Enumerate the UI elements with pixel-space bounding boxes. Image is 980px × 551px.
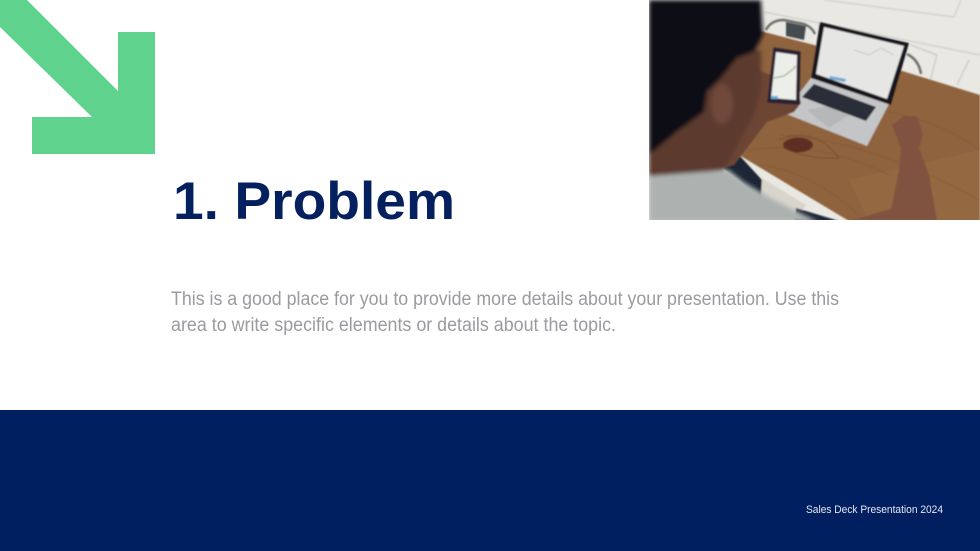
other arm and hand: [889, 116, 937, 221]
table knot: [783, 138, 813, 152]
keyboard: [802, 84, 876, 121]
laptop screen: [811, 22, 909, 105]
footer band: [0, 410, 980, 551]
wall: [649, 0, 980, 220]
photo: man using phone and laptop at wooden table: [649, 0, 980, 222]
icon: green arrow pointing down-right: [0, 0, 155, 154]
body text: [171, 289, 839, 336]
head and neck: [649, 0, 819, 222]
body line 2: area to write specific elements or details about the topic.: [171, 315, 616, 336]
under table: [723, 156, 763, 196]
arm holding phone: [723, 72, 802, 168]
footer text: Sales Deck Presentation 2024: [806, 504, 943, 516]
table: [739, 28, 980, 221]
laptop base: [784, 78, 889, 146]
title: 1. Problem: [173, 172, 455, 231]
chair: [766, 20, 815, 34]
body line 1: This is a good place for you to provide more details about your presentation. Use this: [171, 289, 839, 310]
phone: [768, 48, 800, 104]
